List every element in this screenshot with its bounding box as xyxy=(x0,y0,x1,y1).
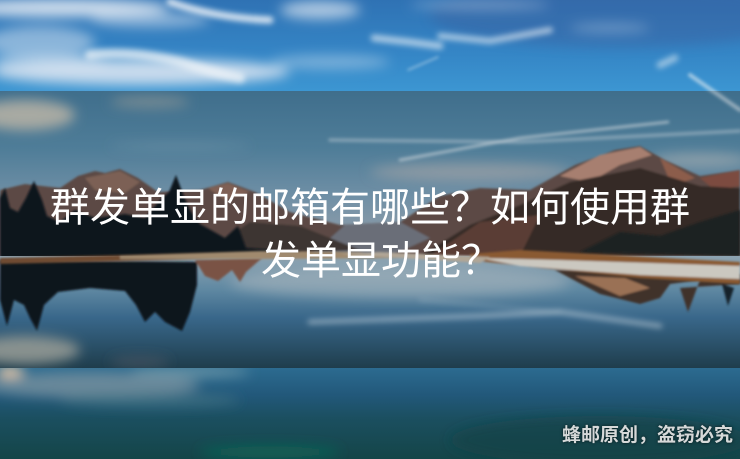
shoreline xyxy=(0,250,740,284)
title: 发单显功能？ xyxy=(261,239,501,283)
distant mountains xyxy=(0,146,740,256)
watermark: 蜂邮原创，盗窃必究 xyxy=(562,425,733,446)
lower water xyxy=(0,366,740,459)
reflected clouds xyxy=(0,300,660,368)
forest left xyxy=(0,175,740,258)
title xyxy=(50,186,690,283)
band scene: sky xyxy=(0,75,740,256)
title: 群发单显的邮箱有哪些？如何使用群 xyxy=(50,186,690,230)
sky above band xyxy=(0,0,740,91)
reflection of forest and mountains xyxy=(0,258,740,331)
lake water in band xyxy=(0,256,740,368)
